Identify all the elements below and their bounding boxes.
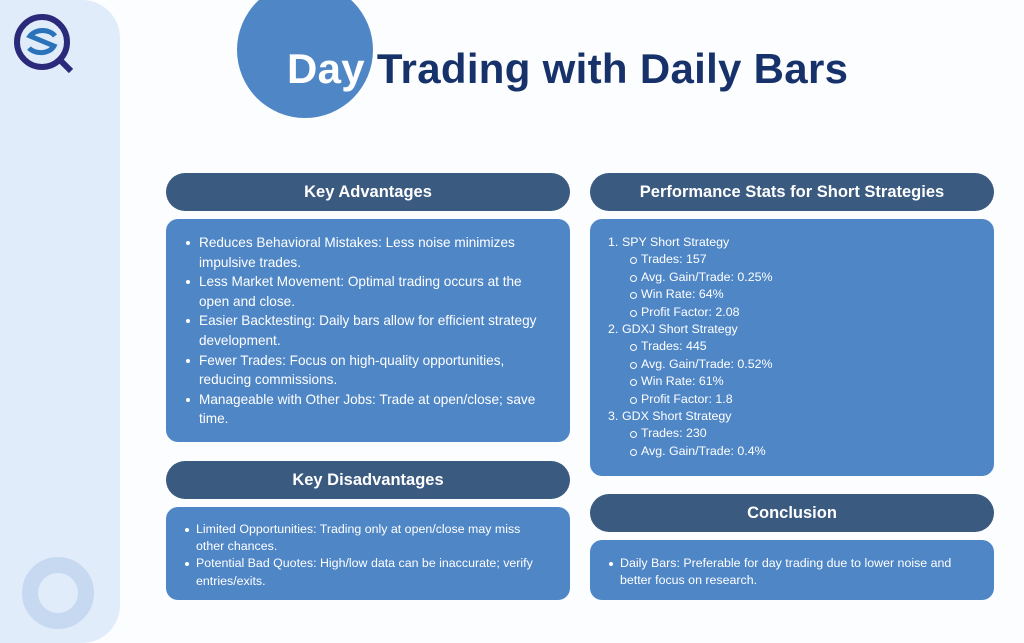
panel: conclusion <box>590 540 994 600</box>
panel: disadvantages: Potential Bad Quotes: High/low data can be inaccurate; verify entries/exits. <box>196 556 533 588</box>
panel: stats: Avg. Gain/Trade: 0.4% <box>641 444 766 458</box>
panel: stats: Trades: 157 <box>641 252 707 266</box>
heading: Conclusion: Conclusion <box>747 504 837 522</box>
panel: disadvantages <box>166 507 570 600</box>
panel: stats: Avg. Gain/Trade: 0.25% <box>641 270 773 284</box>
heading: Conclusion <box>590 494 994 532</box>
title: Day Trading with Daily Bars <box>287 45 848 92</box>
panel: stats: Trades: 445 <box>641 339 707 353</box>
panel: stats: 1. <box>608 235 618 249</box>
panel: stats: GDXJ Short Strategy <box>622 322 738 336</box>
panel: stats: 2. <box>608 322 618 336</box>
panel: conclusion: Daily Bars: Preferable for day trading due to lower noise and better focus on research. <box>620 556 951 587</box>
panel: advantages: Fewer Trades: Focus on high-quality opportunities, reducing commissions. <box>199 353 504 387</box>
heading: Key Advantages: Key Advantages <box>304 183 432 201</box>
heading: Performance Stats <box>590 173 994 211</box>
panel: stats: Win Rate: 64% <box>641 287 724 301</box>
panel: stats: GDX Short Strategy <box>622 409 732 423</box>
panel: stats: Win Rate: 61% <box>641 374 724 388</box>
panel: stats: Profit Factor: 2.08 <box>641 305 739 319</box>
sidebar <box>0 0 120 643</box>
title circle <box>237 0 373 118</box>
logo <box>14 14 74 74</box>
panel: stats: 3. <box>608 409 618 423</box>
panel: advantages: Reduces Behavioral Mistakes: Less noise minimizes impulsive trades. <box>199 235 515 270</box>
panel: advantages: Less Market Movement: Optimal trading occurs at the open and close. <box>199 274 522 309</box>
panel: stats: Profit Factor: 1.8 <box>641 392 733 406</box>
panel: disadvantages: Limited Opportunities: Trading only at open/close may miss other chances. <box>196 522 520 553</box>
heading: Key Disadvantages: Key Disadvantages <box>292 471 444 489</box>
heading: Key Advantages <box>166 173 570 211</box>
panel: stats: Trades: 230 <box>641 426 707 440</box>
panel: advantages: Easier Backtesting: Daily bars allow for efficient strategy development. <box>199 313 536 348</box>
panel: stats <box>590 219 994 476</box>
panel: stats: Avg. Gain/Trade: 0.52% <box>641 357 773 371</box>
panel: advantages <box>166 219 570 442</box>
heading: Key Disadvantages <box>166 461 570 499</box>
panel: advantages: Manageable with Other Jobs: Trade at open/close; save time. <box>199 392 535 426</box>
heading: Performance Stats: Performance Stats for Short Strategies <box>640 183 944 201</box>
decorative ring <box>22 557 94 629</box>
panel: stats: SPY Short Strategy <box>622 235 729 249</box>
